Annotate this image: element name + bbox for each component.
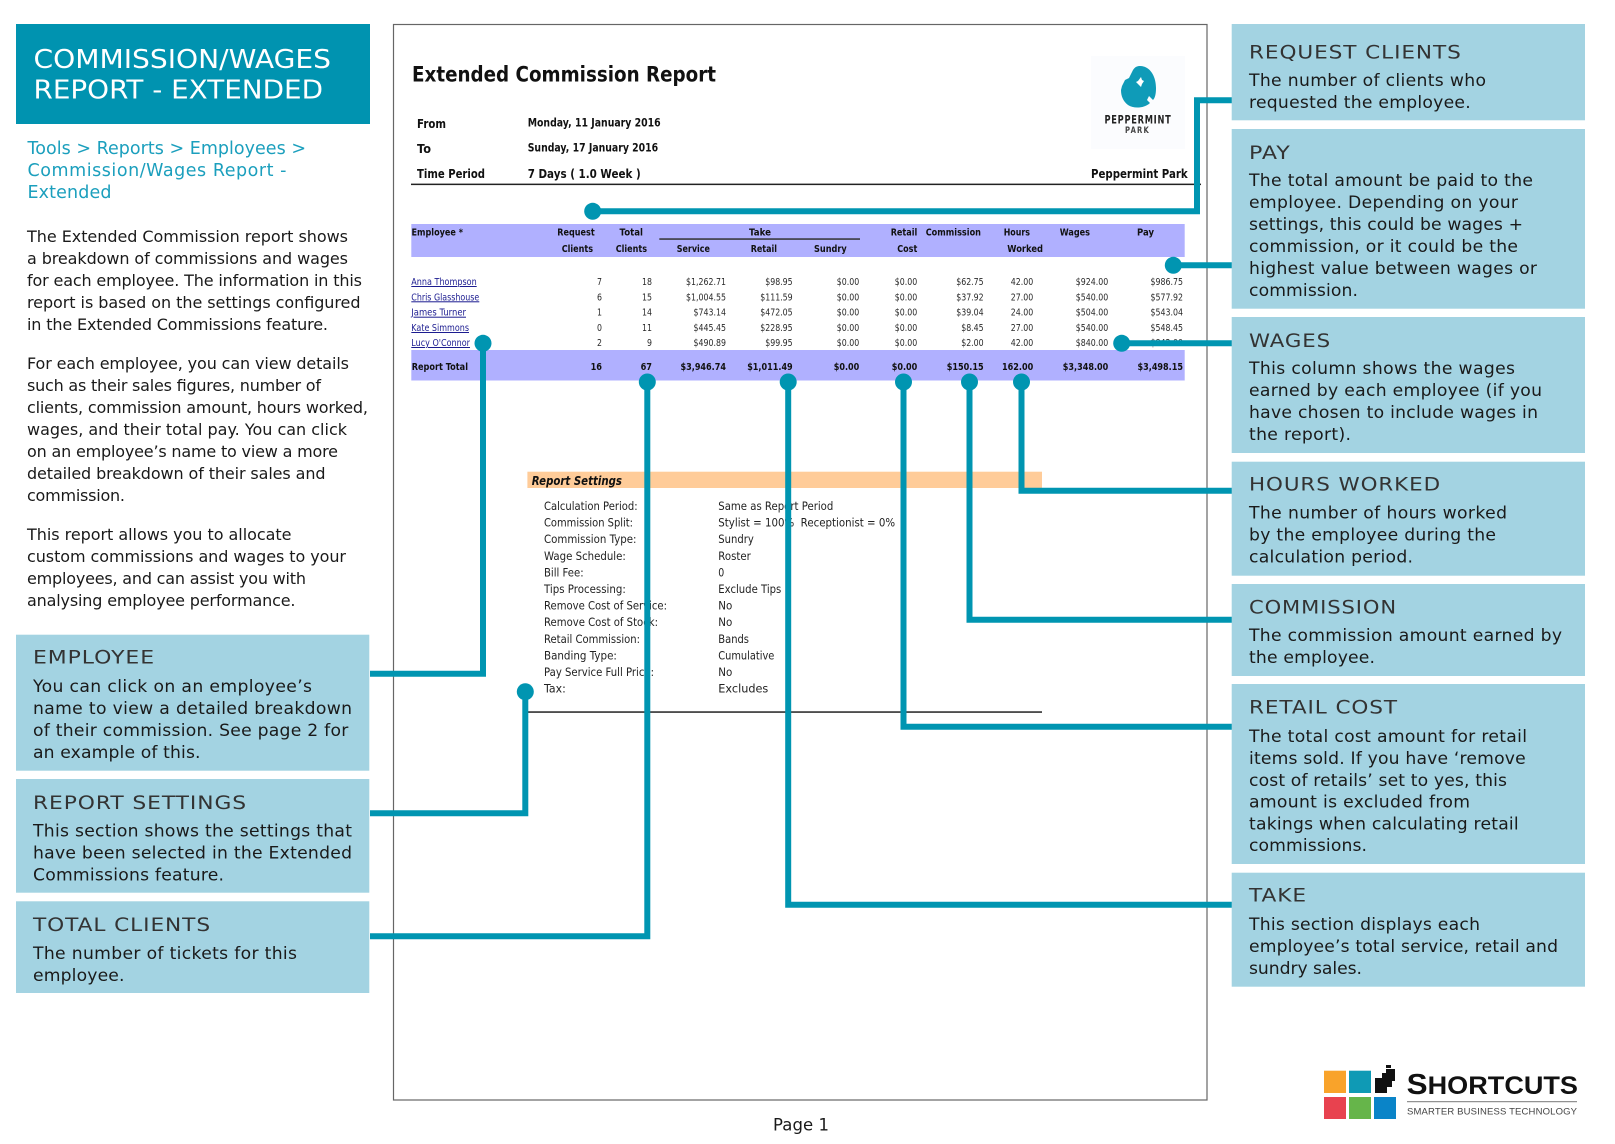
table row: Anna Thompson: 7 — [597, 277, 602, 288]
table row: Anna Thompson: 18 — [642, 277, 652, 288]
table row: Chris Glasshouse — [411, 292, 1183, 303]
callout box: take: TAKE — [1248, 885, 1307, 907]
table row: Chris Glasshouse: 27.00 — [1011, 292, 1033, 303]
callout box: report settings — [16, 779, 369, 893]
report date details — [411, 116, 1201, 185]
table row: Report Total: $0.00 — [892, 362, 917, 373]
callout box: commission: COMMISSION — [1249, 597, 1397, 619]
callout box: total clients: employee. — [33, 966, 124, 986]
table row: Report Total: $3,946.74 — [680, 362, 726, 373]
table row: James Turner: $472.05 — [760, 308, 793, 319]
table row: Chris Glasshouse: $0.00 — [837, 292, 859, 303]
table header row: Employee * — [412, 227, 464, 238]
table row: Lucy O'Connor: 2 — [597, 338, 602, 349]
report settings section: Bands — [718, 632, 749, 646]
breadcrumb navigation path: Commission/Wages Report - — [28, 161, 286, 181]
callout box: retail cost: takings when calculating retail — [1249, 814, 1519, 834]
callout box: request clients: The number of clients who — [1248, 71, 1486, 91]
callout box: pay: The total amount be paid to the — [1248, 171, 1533, 191]
report title: Extended Commission Report — [412, 62, 716, 87]
callout box: commission: The commission amount earned by — [1248, 626, 1562, 646]
table header row: Retail — [891, 227, 917, 238]
callout box: wages: This column shows the wages — [1248, 359, 1515, 379]
breadcrumb navigation path: Extended — [28, 183, 112, 203]
title banner — [16, 24, 370, 124]
table row: Chris Glasshouse: $540.00 — [1076, 292, 1108, 303]
callout box: report settings: REPORT SETTINGS — [33, 792, 247, 814]
report settings section: No — [718, 615, 732, 629]
table row: Lucy O'Connor: $842.00 — [1150, 338, 1183, 349]
table row: Lucy O'Connor — [411, 338, 1183, 349]
callout box: wages — [1232, 317, 1585, 453]
table row: Report Total: 16 — [591, 362, 602, 373]
table row: Lucy O'Connor: 42.00 — [1011, 338, 1033, 349]
intro text block: commission. — [27, 486, 125, 505]
callout box: wages: have chosen to include wages in — [1249, 403, 1538, 423]
table row: Anna Thompson — [411, 277, 1183, 288]
title banner: REPORT - EXTENDED — [34, 76, 323, 106]
callout box: take: sundry sales. — [1249, 959, 1362, 979]
report date details: To — [417, 142, 431, 156]
report date details: Time Period — [417, 167, 485, 181]
table row: Kate Simmons: 0 — [597, 323, 602, 334]
callout connector: total clients — [370, 374, 656, 936]
intro text block: For each employee, you can view details — [27, 354, 349, 373]
icon: Peppermint Park logo — [1091, 56, 1185, 149]
intro text block: a breakdown of commissions and wages — [27, 249, 348, 268]
callout box: wages: earned by each employee (if you — [1249, 381, 1542, 401]
icon: Shortcuts logo — [1324, 1065, 1578, 1119]
callout box: pay: PAY — [1249, 142, 1291, 164]
table row: James Turner: 1 — [597, 308, 602, 319]
callout box: commission — [1232, 584, 1585, 676]
intro text block: on an employee’s name to view a more — [27, 442, 338, 461]
intro text block: wages, and their total pay. You can click — [27, 420, 348, 439]
table row: Lucy O'Connor: 9 — [647, 338, 652, 349]
report settings section: Remove Cost of Stock: — [544, 615, 658, 629]
table header row: Clients — [562, 244, 593, 255]
table row: Kate Simmons: $548.45 — [1150, 323, 1183, 334]
table row: Lucy O'Connor: Lucy O'Connor — [411, 338, 471, 349]
table header row: Hours — [1004, 227, 1030, 238]
title banner: COMMISSION/WAGES — [34, 45, 331, 75]
report date details: From — [417, 117, 446, 131]
table row: Kate Simmons: $0.00 — [895, 323, 917, 334]
table header row: Retail — [751, 244, 777, 255]
callout connector: report settings — [370, 683, 534, 813]
report settings section: Commission Split: — [544, 516, 633, 530]
table row: Anna Thompson: $98.95 — [765, 277, 793, 288]
callout box: report settings: Commissions feature. — [33, 866, 224, 886]
table row: Report Total: $0.00 — [834, 362, 859, 373]
callout box: commission: the employee. — [1249, 648, 1375, 668]
callout box: hours worked: by the employee during the — [1249, 526, 1496, 546]
breadcrumb navigation path — [26, 139, 306, 203]
table row: Chris Glasshouse: $577.92 — [1150, 292, 1183, 303]
table row: Anna Thompson: $0.00 — [895, 277, 917, 288]
table header row: Worked — [1007, 244, 1043, 255]
table row: Chris Glasshouse: Chris Glasshouse — [411, 292, 479, 303]
callout box: retail cost — [1232, 684, 1585, 864]
callout box: retail cost: cost of retails’ set to yes, this — [1249, 771, 1507, 791]
table header row: Take — [749, 227, 771, 238]
table row: Kate Simmons: 11 — [642, 323, 652, 334]
report settings section: Roster — [718, 549, 751, 563]
table row: Chris Glasshouse: $111.59 — [760, 292, 793, 303]
table header row: Sundry — [814, 244, 847, 255]
table row: Report Total: $150.15 — [947, 362, 984, 373]
report settings section: Bill Fee: — [544, 565, 584, 579]
report settings section — [527, 472, 1042, 713]
table row: Lucy O'Connor: $0.00 — [837, 338, 859, 349]
intro text block: in the Extended Commissions feature. — [27, 315, 328, 334]
callout connector: request clients — [584, 100, 1232, 220]
table row: Lucy O'Connor: $840.00 — [1076, 338, 1108, 349]
intro text block: employees, and can assist you with — [27, 569, 306, 588]
table row: Anna Thompson: Anna Thompson — [411, 277, 477, 288]
table row: Anna Thompson: $1,262.71 — [686, 277, 726, 288]
callout box: request clients — [1232, 24, 1585, 120]
callout box: total clients: TOTAL CLIENTS — [32, 914, 211, 936]
callout box: employee — [16, 635, 369, 771]
callout connector: commission — [961, 374, 1232, 620]
report date details: Sunday, 17 January 2016 — [528, 140, 658, 154]
report date details: Peppermint Park — [1091, 167, 1189, 181]
table row: James Turner: $0.00 — [837, 308, 859, 319]
callout box: hours worked: HOURS WORKED — [1249, 474, 1441, 496]
table row: Chris Glasshouse: $37.92 — [956, 292, 984, 303]
report settings section: Tips Processing: — [543, 582, 626, 596]
callout box: request clients: REQUEST CLIENTS — [1249, 41, 1462, 63]
table row: Kate Simmons: Kate Simmons — [411, 323, 469, 334]
report settings section: Calculation Period: — [544, 499, 638, 513]
callout box: take: employee’s total service, retail and — [1249, 937, 1558, 957]
table row: James Turner: $543.04 — [1150, 308, 1183, 319]
report settings section: Retail Commission: — [544, 632, 640, 646]
table row: Report Total: $3,498.15 — [1138, 362, 1183, 373]
report settings section: No — [718, 599, 732, 613]
table row: James Turner: James Turner — [410, 308, 467, 319]
table header row: Pay — [1137, 227, 1154, 238]
callout connector: pay — [1165, 257, 1232, 274]
callout box: take — [1232, 873, 1585, 987]
intro text block: detailed breakdown of their sales and — [27, 464, 326, 483]
table row: James Turner: 14 — [642, 308, 652, 319]
panel: sample report page — [394, 24, 1207, 1100]
callout box: pay: employee. Depending on your — [1249, 193, 1519, 213]
report settings section: Wage Schedule: — [544, 549, 626, 563]
intro text block — [26, 227, 368, 610]
table header row: Request — [557, 227, 595, 238]
intro text block: such as their sales figures, number of — [27, 376, 321, 395]
callout box: total clients — [16, 901, 369, 993]
report settings section: Remove Cost of Service: — [544, 599, 667, 613]
table row: Report Total: 67 — [641, 362, 652, 373]
callout box: employee: EMPLOYEE — [33, 647, 155, 669]
callout connector: hours worked — [1013, 374, 1232, 491]
report settings section: Pay Service Full Price: — [544, 665, 654, 679]
callout box: report settings: have been selected in the Extended — [33, 844, 352, 864]
report settings section: Commission Type: — [544, 532, 636, 546]
intro text block: custom commissions and wages to your — [27, 547, 346, 566]
table row: Anna Thompson: $924.00 — [1076, 277, 1108, 288]
callout connector: wages — [1113, 335, 1232, 352]
table row: James Turner: $39.04 — [956, 308, 984, 319]
table row: James Turner: $0.00 — [895, 308, 917, 319]
report settings section: Same as Report Period — [718, 499, 833, 513]
table row: Kate Simmons: $228.95 — [760, 323, 793, 334]
table row: Anna Thompson: 42.00 — [1011, 277, 1033, 288]
table row: Lucy O'Connor: $2.00 — [961, 338, 984, 349]
callout box: total clients: The number of tickets for this — [32, 944, 297, 964]
callout box: employee: of their commission. See page 2 for — [33, 721, 349, 741]
callout box: hours worked — [1232, 462, 1585, 576]
report settings section: 0 — [718, 565, 724, 579]
table row: Report Total: $3,348.00 — [1063, 362, 1108, 373]
icon: Shortcuts logo: SHORTCUTS — [1407, 1069, 1578, 1101]
intro text block: for each employee. The information in this — [27, 271, 362, 290]
callout box: request clients: requested the employee. — [1249, 93, 1471, 113]
callout box: pay — [1232, 129, 1585, 309]
callout box: employee: You can click on an employee’s — [32, 677, 312, 697]
table row: Chris Glasshouse: $1,004.55 — [686, 292, 726, 303]
table row: Chris Glasshouse: 15 — [642, 292, 652, 303]
table header row — [411, 224, 1185, 257]
table row: Chris Glasshouse: $0.00 — [895, 292, 917, 303]
table row: James Turner: $504.00 — [1076, 308, 1108, 319]
callout box: pay: commission, or it could be the — [1249, 237, 1518, 257]
report date details: 7 Days ( 1.0 Week ) — [528, 167, 641, 181]
callout box: wages: the report). — [1249, 425, 1351, 445]
table row: Kate Simmons: 27.00 — [1011, 323, 1033, 334]
table row: Anna Thompson: $62.75 — [956, 277, 984, 288]
table row: Chris Glasshouse: 6 — [597, 292, 602, 303]
table row: Report Total — [411, 350, 1185, 380]
intro text block: This report allows you to allocate — [26, 525, 292, 544]
table row: Anna Thompson: $986.75 — [1150, 277, 1183, 288]
table row: Report Total: $1,011.49 — [747, 362, 793, 373]
callout box: take: This section displays each — [1248, 915, 1480, 935]
report settings section: Stylist = 100% Receptionist = 0% — [718, 516, 895, 530]
table header row: Commission — [926, 227, 981, 238]
table header row: Cost — [897, 244, 917, 255]
report settings section: Cumulative — [718, 648, 774, 662]
table row: Report Total: Report Total — [412, 362, 468, 373]
intro text block: clients, commission amount, hours worked, — [27, 398, 368, 417]
report date details: Monday, 11 January 2016 — [528, 116, 661, 130]
callout box: retail cost: items sold. If you have ‘remove — [1249, 749, 1526, 769]
report settings section: Excludes — [718, 681, 768, 695]
table row: Kate Simmons: $540.00 — [1076, 323, 1108, 334]
table row: James Turner: 24.00 — [1011, 308, 1033, 319]
table row: James Turner: $743.14 — [694, 308, 726, 319]
table row: Lucy O'Connor: $99.95 — [765, 338, 793, 349]
callout box: hours worked: The number of hours worked — [1248, 504, 1507, 524]
table header row: Total — [620, 227, 643, 238]
callout box: retail cost: commissions. — [1249, 836, 1367, 856]
breadcrumb navigation path: Tools > Reports > Employees > — [26, 139, 306, 159]
intro text block: report is based on the settings configured — [27, 293, 360, 312]
table header row: Service — [677, 244, 710, 255]
table row: Lucy O'Connor: $490.89 — [694, 338, 726, 349]
report settings section: No — [718, 665, 732, 679]
callout box: employee: name to view a detailed breakdown — [33, 699, 352, 719]
report settings section: Sundry — [718, 532, 754, 546]
report settings section: Exclude Tips — [718, 582, 781, 596]
table row: Kate Simmons: $445.45 — [694, 323, 726, 334]
report settings section: Banding Type: — [544, 648, 617, 662]
report settings section: Tax: — [543, 681, 566, 695]
callout box: pay: commission. — [1249, 281, 1358, 301]
icon: Peppermint Park logo: PEPPERMINT — [1104, 112, 1172, 126]
table row: Kate Simmons — [411, 323, 1183, 334]
table header row: Clients — [616, 244, 647, 255]
callout connector: retail cost — [895, 374, 1232, 727]
intro text block: The Extended Commission report shows — [26, 227, 348, 246]
callout box: retail cost: The total cost amount for retail — [1248, 727, 1527, 747]
icon: Peppermint Park logo: PARK — [1125, 126, 1150, 136]
callout box: pay: highest value between wages or — [1249, 259, 1538, 279]
table row: Kate Simmons: $8.45 — [961, 323, 984, 334]
table row: Kate Simmons: $0.00 — [837, 323, 859, 334]
callout box: wages: WAGES — [1249, 330, 1331, 352]
callout connector: employee — [370, 335, 492, 674]
callout box: retail cost: amount is excluded from — [1249, 792, 1470, 812]
page number: Page 1 — [773, 1116, 829, 1135]
table row: Lucy O'Connor: $0.00 — [895, 338, 917, 349]
callout box: report settings: This section shows the settings that — [32, 822, 352, 842]
callout box: hours worked: calculation period. — [1249, 548, 1413, 568]
callout box: pay: settings, this could be wages + — [1249, 215, 1523, 235]
report settings section: Report Settings — [532, 474, 622, 488]
table header row: Wages — [1060, 227, 1090, 238]
callout box: retail cost: RETAIL COST — [1249, 697, 1398, 719]
table row: James Turner — [410, 308, 1183, 319]
table row: Anna Thompson: $0.00 — [837, 277, 859, 288]
table row: Report Total: 162.00 — [1002, 362, 1033, 373]
callout connector: take — [780, 374, 1232, 905]
icon: Shortcuts logo: SMARTER BUSINESS TECHNOLOGY — [1407, 1106, 1578, 1117]
callout box: employee: an example of this. — [33, 743, 200, 763]
intro text block: analysing employee performance. — [27, 591, 296, 610]
